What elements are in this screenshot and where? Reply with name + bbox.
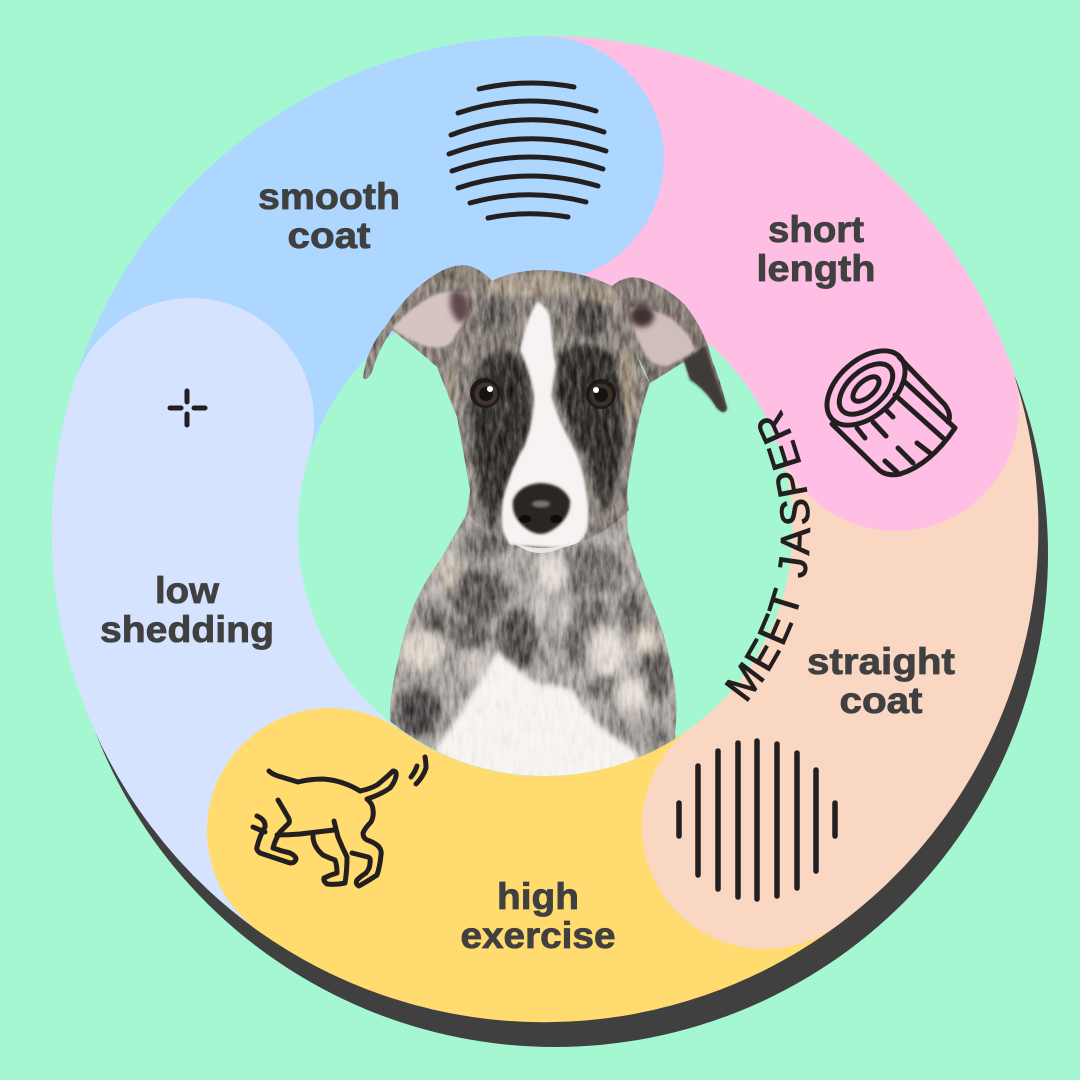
label: low shedding: [100, 570, 274, 650]
rounded end of peach segment: [642, 703, 888, 949]
cheek fur: [478, 505, 491, 530]
dog nose: [513, 483, 570, 534]
label: straight coat: straight: [807, 641, 955, 682]
dog body: [390, 492, 676, 776]
white chest: [430, 650, 640, 790]
label: high exercise: [460, 876, 616, 956]
label: smooth coat: coat: [288, 215, 370, 256]
icon: measuring tape log: [813, 336, 955, 475]
left ear inner: [392, 291, 468, 348]
white blaze: [502, 302, 589, 548]
label: low shedding: shedding: [100, 609, 274, 650]
dog head: [437, 270, 650, 549]
right ear: [612, 277, 727, 412]
dark patch left: [470, 350, 530, 530]
left ear: [363, 265, 494, 379]
mask of hole against shadow: [245, 229, 845, 829]
label: short length: [756, 209, 876, 289]
label: smooth coat: smooth: [258, 176, 400, 217]
label: high exercise: high: [497, 876, 579, 917]
right ear shadow: [630, 305, 654, 327]
segment: high exercise (yellow): [330, 826, 765, 899]
left ear shadow: [450, 290, 470, 322]
rounded end of pink segment: [773, 285, 1019, 531]
icon: low shedding sparkle: [170, 391, 205, 425]
label: short length: short: [768, 209, 864, 250]
rounded end of lavender segment: [68, 298, 314, 544]
rounded end of yellow segment: [207, 708, 453, 954]
label: straight coat: coat: [840, 680, 922, 721]
icon: smooth coat curved lines: [449, 83, 606, 218]
dog chin: [510, 540, 572, 553]
dark patch right: [558, 345, 623, 510]
right ear inner: [630, 308, 695, 366]
segment: low shedding (lavender): [175, 421, 330, 831]
right ear dark flap: [684, 345, 727, 412]
segment: straight coat (peach): [765, 410, 915, 826]
segment: smooth coat (blue): [191, 159, 541, 421]
label: smooth coat: [258, 176, 400, 256]
segment: short length (pink): [541, 159, 896, 410]
left eye: [470, 378, 500, 408]
donut ring of five trait segments: [68, 36, 1019, 954]
rounded end of blue segment: [418, 36, 664, 282]
label: short length: length: [756, 248, 876, 289]
label: high exercise: exercise: [460, 915, 616, 956]
label: low shedding: low: [155, 570, 219, 611]
icon: straight coat vertical lines: [679, 741, 835, 899]
label: straight coat: [807, 641, 955, 721]
right eye: [586, 379, 616, 409]
dog photo illustration: [363, 262, 727, 790]
heading: meet jasper curved text: MEET JASPER: [724, 409, 810, 702]
icon: wagging dog tail: [253, 757, 426, 886]
